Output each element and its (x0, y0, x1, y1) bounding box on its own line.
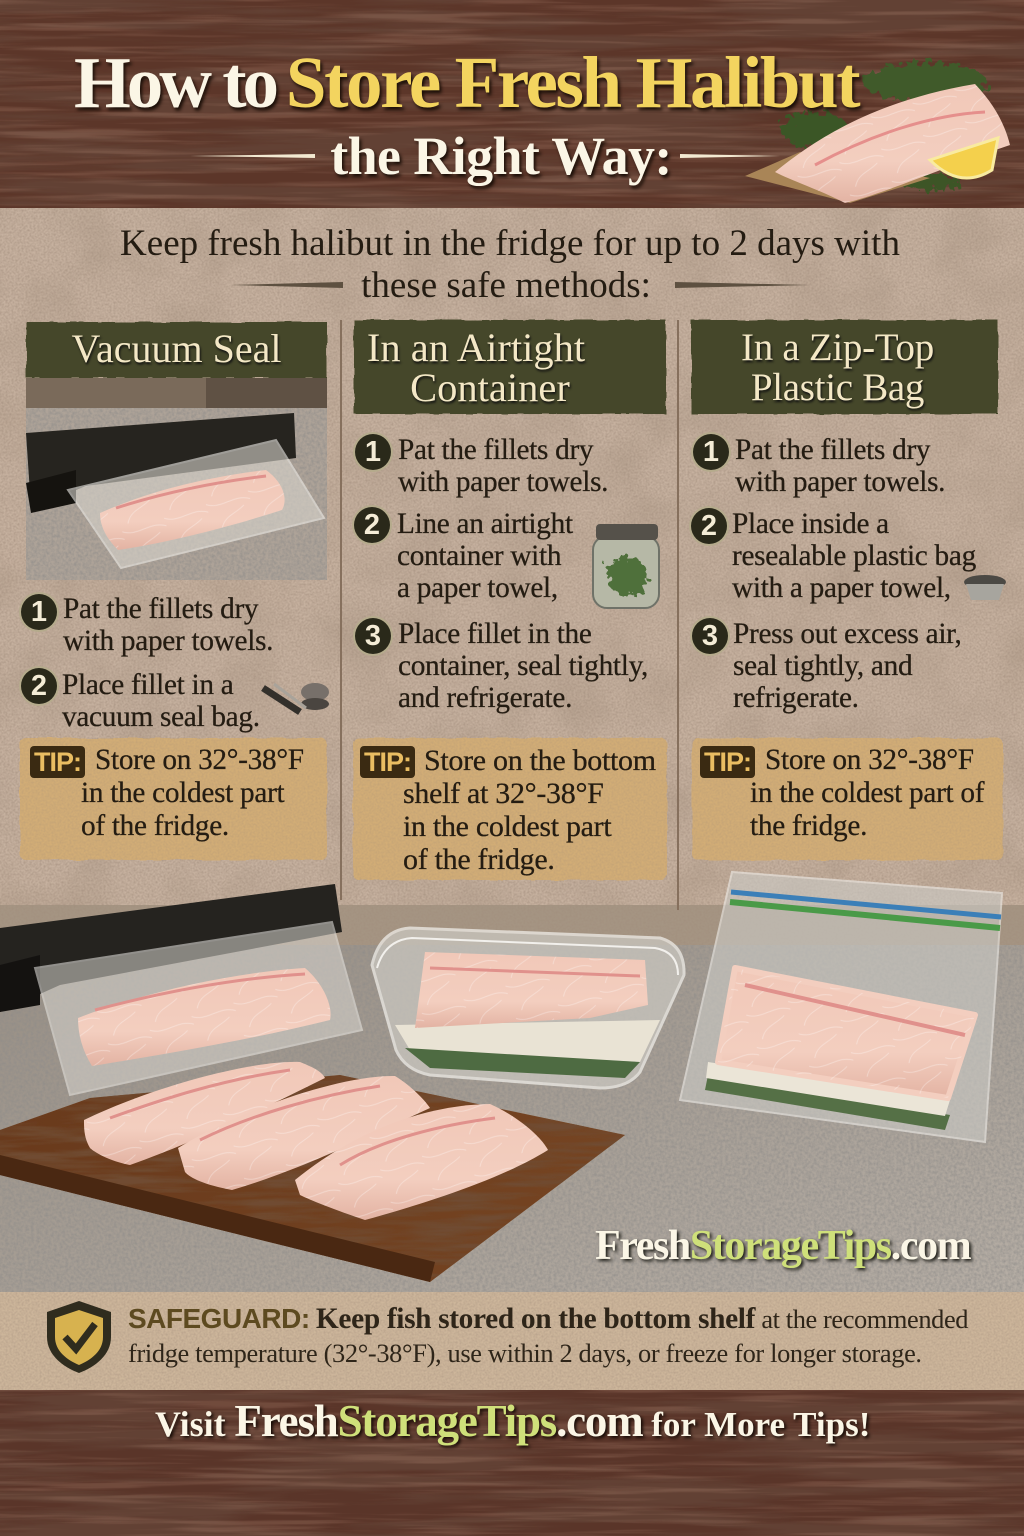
heading: zip-top bag: Plastic Bag (751, 366, 924, 409)
image: vacuum sealer with fillet (26, 378, 327, 580)
panel: airtight container (352, 325, 660, 876)
safeguard text (128, 1303, 968, 1368)
safeguard text: fridge temperature (32°-38°F), use within 2 days, or freeze for longer storage. (128, 1338, 922, 1368)
tip text: shelf at 32°-38°F (403, 777, 604, 810)
step text 2: resealable plastic bag (732, 540, 976, 572)
vacuum sealer (0, 884, 362, 1095)
step text 3 (398, 618, 648, 714)
tip text: Store on 32°-38°F (765, 744, 974, 776)
icon: small jar (964, 575, 1006, 600)
zip-top bag (680, 872, 1002, 1142)
intro text (120, 223, 900, 306)
step text 1: Pat the fillets dry (735, 434, 930, 466)
tip text (750, 744, 985, 842)
step number 2 (354, 507, 390, 543)
step text 3: seal tightly, and (733, 650, 912, 682)
heading: zip-top bag (741, 326, 935, 412)
step number 1: 1 (703, 436, 719, 468)
safeguard text: SAFEGUARD: Keep fish stored on the bottom shelf at the recommended (128, 1303, 968, 1335)
step text 3 (733, 618, 961, 714)
step text 2: vacuum seal bag. (62, 701, 260, 733)
cutting board with fillets (0, 1062, 625, 1282)
tip label: TIP: (34, 747, 81, 777)
tip text: in the coldest part (81, 777, 284, 809)
icon: halibut fillet with lemon (745, 58, 1010, 203)
step number 3 (355, 618, 391, 654)
step number 3: 3 (702, 620, 718, 652)
step text 2 (397, 508, 574, 604)
tip text: in the coldest part of (750, 777, 984, 809)
title: How to Store Fresh Halibut (74, 42, 858, 123)
step number 3: 3 (365, 620, 381, 652)
step text 2: Line an airtight (397, 508, 573, 540)
step text 3: and refrigerate. (398, 682, 572, 714)
step text 2: Place inside a (732, 508, 889, 540)
photo: storage methods on counter (0, 871, 1003, 1282)
step text 1 (398, 434, 608, 498)
step number 2: 2 (31, 670, 47, 702)
heading: vacuum seal: Vacuum Seal (72, 326, 281, 371)
step text 1 (734, 434, 945, 498)
heading: airtight container: In an Airtight (367, 325, 585, 370)
icon: herb jar (592, 524, 660, 609)
step text 3: container, seal tightly, (398, 650, 648, 682)
tip text: of the fridge. (81, 810, 229, 842)
heading: airtight container: Container (410, 365, 570, 410)
step number 1 (355, 434, 391, 470)
tip text: Store on the bottom (424, 744, 656, 777)
step text 2: a paper towel, (397, 572, 558, 604)
step text 1: with paper towels. (398, 466, 608, 498)
steps (352, 432, 660, 714)
step number 1 (693, 434, 729, 470)
tip text: the fridge. (750, 810, 867, 842)
step number 2 (21, 668, 57, 704)
heading: zip-top bag: In a Zip-Top (741, 326, 934, 369)
tip box (700, 744, 985, 842)
step text 3: Place fillet in the (398, 618, 592, 650)
step text 3: Press out excess air, (733, 618, 961, 650)
step text 2 (732, 508, 976, 604)
step text 2: container with (397, 540, 561, 572)
subtitle: the Right Way: (330, 126, 672, 186)
website watermark: FreshStorageTips.com (595, 1223, 970, 1269)
intro text: these safe methods: (361, 265, 651, 306)
step text 1: Pat the fillets dry (398, 434, 593, 466)
step number 1 (21, 594, 57, 630)
panel: vacuum seal (19, 326, 329, 842)
tip label: TIP: (364, 747, 411, 777)
subtitle flourishes (192, 154, 779, 158)
intro flourishes (232, 282, 808, 288)
tip box (360, 744, 656, 876)
step text 1: Pat the fillets dry (63, 593, 258, 625)
tip label: TIP: (704, 747, 751, 777)
panel: zip-top bag (689, 326, 1006, 842)
steps (19, 592, 329, 733)
icon: sealing clips (261, 683, 329, 715)
icon: shield check (47, 1301, 111, 1373)
tip text: Store on 32°-38°F (95, 744, 304, 776)
tip text: of the fridge. (403, 843, 555, 876)
step text 1: with paper towels. (63, 625, 273, 657)
steps (689, 432, 1006, 714)
step number 3 (692, 618, 728, 654)
step number 1: 1 (31, 596, 47, 628)
footer call to action: Visit FreshStorageTips.com for More Tips! (155, 1396, 870, 1446)
step number 2 (691, 508, 727, 544)
step text 1: with paper towels. (735, 466, 945, 498)
step number 2: 2 (364, 509, 380, 541)
step text 1 (62, 593, 273, 657)
step number 2: 2 (701, 510, 717, 542)
tip text (403, 744, 656, 876)
tip text (81, 744, 304, 842)
step text 2: with a paper towel, (732, 572, 951, 604)
tip box (30, 744, 304, 842)
step text 2 (62, 669, 260, 733)
step text 3: refrigerate. (733, 682, 859, 714)
tip text: in the coldest part (403, 810, 611, 843)
intro text: Keep fresh halibut in the fridge for up to 2 days with (120, 223, 900, 264)
airtight container (372, 928, 684, 1088)
step text 2: Place fillet in a (62, 669, 233, 701)
step number 1: 1 (365, 436, 381, 468)
heading: airtight container (367, 325, 586, 410)
